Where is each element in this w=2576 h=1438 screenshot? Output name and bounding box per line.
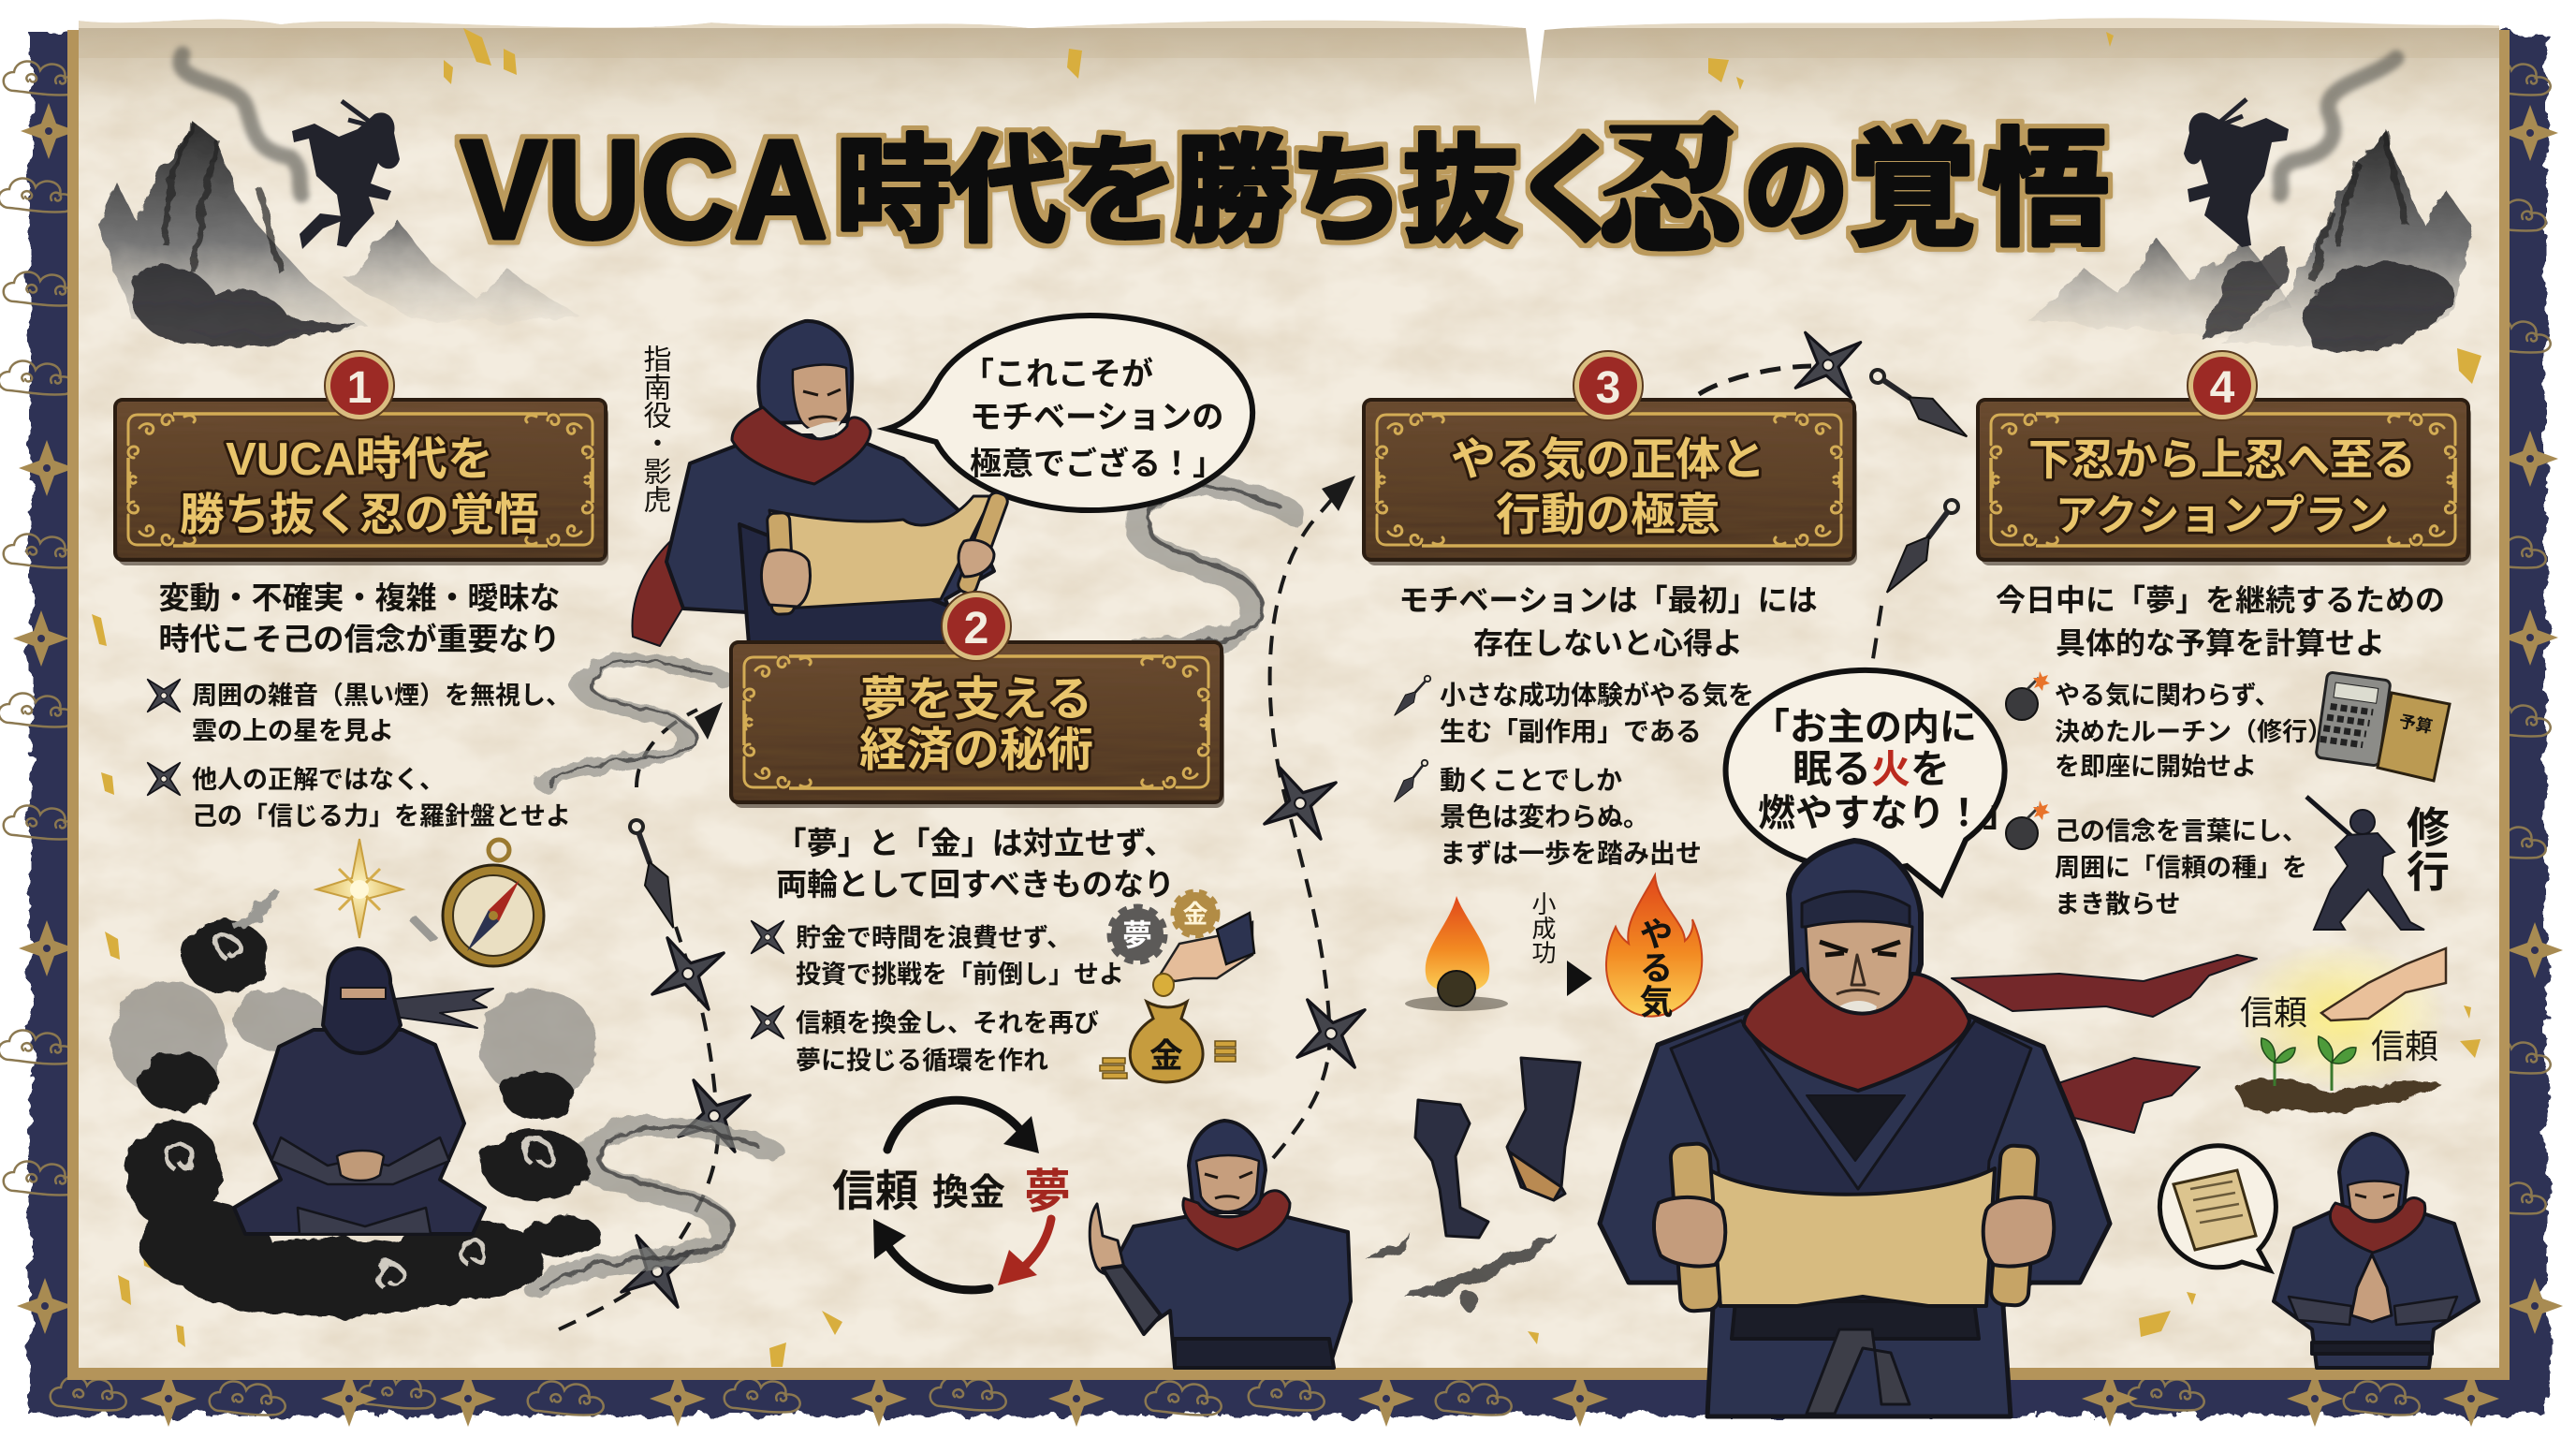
panel 4 text: 己の信念を言葉にし、 (2055, 817, 2307, 845)
icon: gears and hand with coin (1111, 892, 1254, 996)
panel 2 text (752, 826, 1175, 1075)
panel 1 text: 他人の正解ではなく、 (192, 766, 445, 794)
icon: guiding star (316, 839, 402, 938)
icon: calculator and budget book (2316, 672, 2450, 781)
panel 3 heading: 3 (1596, 363, 1620, 413)
speech bubble: big ninja: 眠る火を (1793, 747, 1950, 791)
panel 3 text (1390, 583, 1818, 868)
title: VUCA (461, 110, 827, 268)
icon: walking feet (1415, 1058, 1580, 1238)
panel 3 heading: やる気の正体と (1451, 435, 1765, 485)
title: の (1744, 133, 1849, 250)
right smoke wisp (2280, 58, 2396, 195)
cycle diagram: 夢 (1024, 1166, 1071, 1218)
panel 2 text: 両輪として回すべきものなり (776, 867, 1175, 902)
icon: hand sowing trust seeds: 信頼 (2371, 1027, 2438, 1065)
panel 4 heading: 4 (2210, 363, 2235, 413)
panel 3 text: まずは一歩を踏み出せ (1440, 839, 1702, 868)
panel 2 heading: 夢を支える (860, 673, 1092, 726)
icon: hand sowing trust seeds: 信頼 (2240, 993, 2307, 1032)
icon: gears and hand with coin: 夢 (1122, 918, 1152, 952)
panel 4 text: やる気に関わらず、 (2055, 682, 2280, 710)
panel 1 text: 雲の上の星を見よ (192, 717, 394, 745)
panel 1 heading (115, 351, 608, 565)
panel 3 text: 景色は変わらぬ。 (1440, 802, 1649, 831)
speech bubble: big ninja (1726, 670, 2020, 894)
speech bubble: guide: モチベーションの (970, 400, 1223, 435)
panel 1 heading: VUCA時代を (226, 434, 493, 485)
panel 2 text: 投資で挑戦を「前倒し」せよ (796, 961, 1124, 989)
right ink mountains (2027, 128, 2471, 353)
icon: money bag (1100, 1002, 1236, 1082)
panel 2 text: 信頼を換金し、それを再び (796, 1009, 1099, 1037)
panel 1 heading: 勝ち抜く忍の覚悟 (180, 491, 539, 540)
speech bubble: guide (887, 315, 1252, 510)
cycle diagram: 換金 (932, 1173, 1005, 1213)
title (461, 110, 2110, 270)
icon: calculator and budget book: 予算 (2397, 711, 2435, 737)
title: 覚悟 (1849, 119, 2110, 261)
icon: money bag: 金 (1149, 1036, 1183, 1075)
panel 4 text: まき散らせ (2055, 890, 2180, 918)
panel 4 text: 周囲に「信頼の種」を (2055, 854, 2307, 882)
label: 修行: 修行 (2401, 805, 2450, 893)
icon: big flame with やる気 (1606, 875, 1702, 1018)
character: meditating ninja (234, 948, 493, 1234)
label: small success arrow (1510, 891, 1592, 996)
panel 4 text: 具体的な予算を計算せよ (2056, 626, 2385, 660)
left smoke wisp (181, 54, 301, 195)
panel 3 text: 生む「副作用」である (1440, 717, 1702, 746)
icon: big flame with やる気: やる気 (1634, 917, 1674, 1018)
panel 2 text: 夢に投じる循環を作れ (796, 1047, 1048, 1075)
arrowheads (695, 476, 1355, 740)
label: small success arrow: 小成功 (1529, 891, 1557, 964)
panel 3 text: 動くことでしか (1440, 766, 1622, 795)
icon: small flame with rock (1405, 896, 1508, 1011)
panel 3 heading (1364, 351, 1857, 565)
panel 4 text: を即座に開始せよ (2055, 753, 2257, 781)
panel 1 text: 周囲の雑音（黒い煙）を無視し、 (192, 682, 571, 710)
panel 1 heading: 1 (347, 363, 372, 413)
speech bubble: guide: 極意でござる！」 (970, 446, 1224, 482)
panel 2 text: 「夢」と「金」は対立せず、 (776, 826, 1175, 860)
ink brush strokes (1366, 1231, 1554, 1311)
icon: compass (443, 840, 544, 966)
speech bubble: scroll icon (2159, 1146, 2276, 1270)
panel 3 text: モチベーションは「最初」には (1398, 583, 1818, 617)
character: bowing ninja (2274, 1134, 2479, 1368)
cycle diagram: 信頼 (832, 1167, 918, 1215)
panel 3 text: 存在しないと心得よ (1473, 626, 1743, 660)
panel 1 text (148, 580, 571, 830)
panel 4 heading: 下忍から上忍へ至る (2028, 435, 2416, 484)
icon: left leaping ninja (292, 101, 400, 249)
title: 時代を勝ち抜く (836, 127, 1628, 257)
dashed path: shuriken trail to panel 2 (559, 710, 718, 1329)
panel 2 heading: 2 (964, 604, 988, 653)
panel 4 text: 決めたルーチン（修行） (2055, 718, 2333, 746)
icon: training ninja (2306, 797, 2424, 930)
ink smoke swirls (538, 484, 1292, 1290)
panel 2 heading: 経済の秘術 (859, 724, 1093, 776)
character: guide ninja with scroll (632, 321, 1010, 646)
icon: hand sowing trust seeds (2232, 941, 2448, 1113)
dashed path: trail to kunai (1699, 366, 1881, 665)
panel 1 text: 変動・不確実・複雑・曖昧な (159, 580, 560, 615)
panel 4 heading (1978, 351, 2471, 565)
panel 1 text: 時代こそ己の信念が重要なり (159, 622, 560, 656)
title: 忍 (1598, 112, 1756, 270)
cycle diagram (832, 1100, 1071, 1290)
speech bubble: guide: 「これこそが (962, 356, 1153, 392)
ink clouds (110, 889, 601, 1317)
panel 4 heading: アクションプラン (2056, 492, 2389, 539)
panel 4 text (1996, 583, 2445, 918)
shuriken and kunai on the trails (622, 332, 1974, 1307)
caption: guide name: 指南役・影虎 (638, 345, 672, 513)
icon: gears and hand with coin: 金 (1183, 901, 1208, 929)
panel 2 text: 貯金で時間を浪費せず、 (796, 924, 1072, 952)
left ink mountains (98, 122, 582, 345)
panel 4 text: 今日中に「夢」を継続するための (1996, 583, 2445, 617)
icon: right leaping ninja (2184, 99, 2289, 247)
panel 3 heading: 行動の極意 (1496, 491, 1720, 540)
panel 3 text: 小さな成功体験がやる気を (1440, 680, 1754, 710)
speech bubble: big ninja: 燃やすなり！」 (1758, 793, 2020, 834)
panel 2 heading (731, 592, 1224, 808)
dashed path: trail to panel 3 (1270, 492, 1339, 1158)
character: big ninja with scroll (1600, 841, 2257, 1416)
speech bubble: big ninja: 「お主の内に (1752, 707, 1977, 748)
panel 1 text: 己の「信じる力」を羅針盤とせよ (192, 802, 571, 830)
character: pointing ninja (1090, 1121, 1351, 1368)
